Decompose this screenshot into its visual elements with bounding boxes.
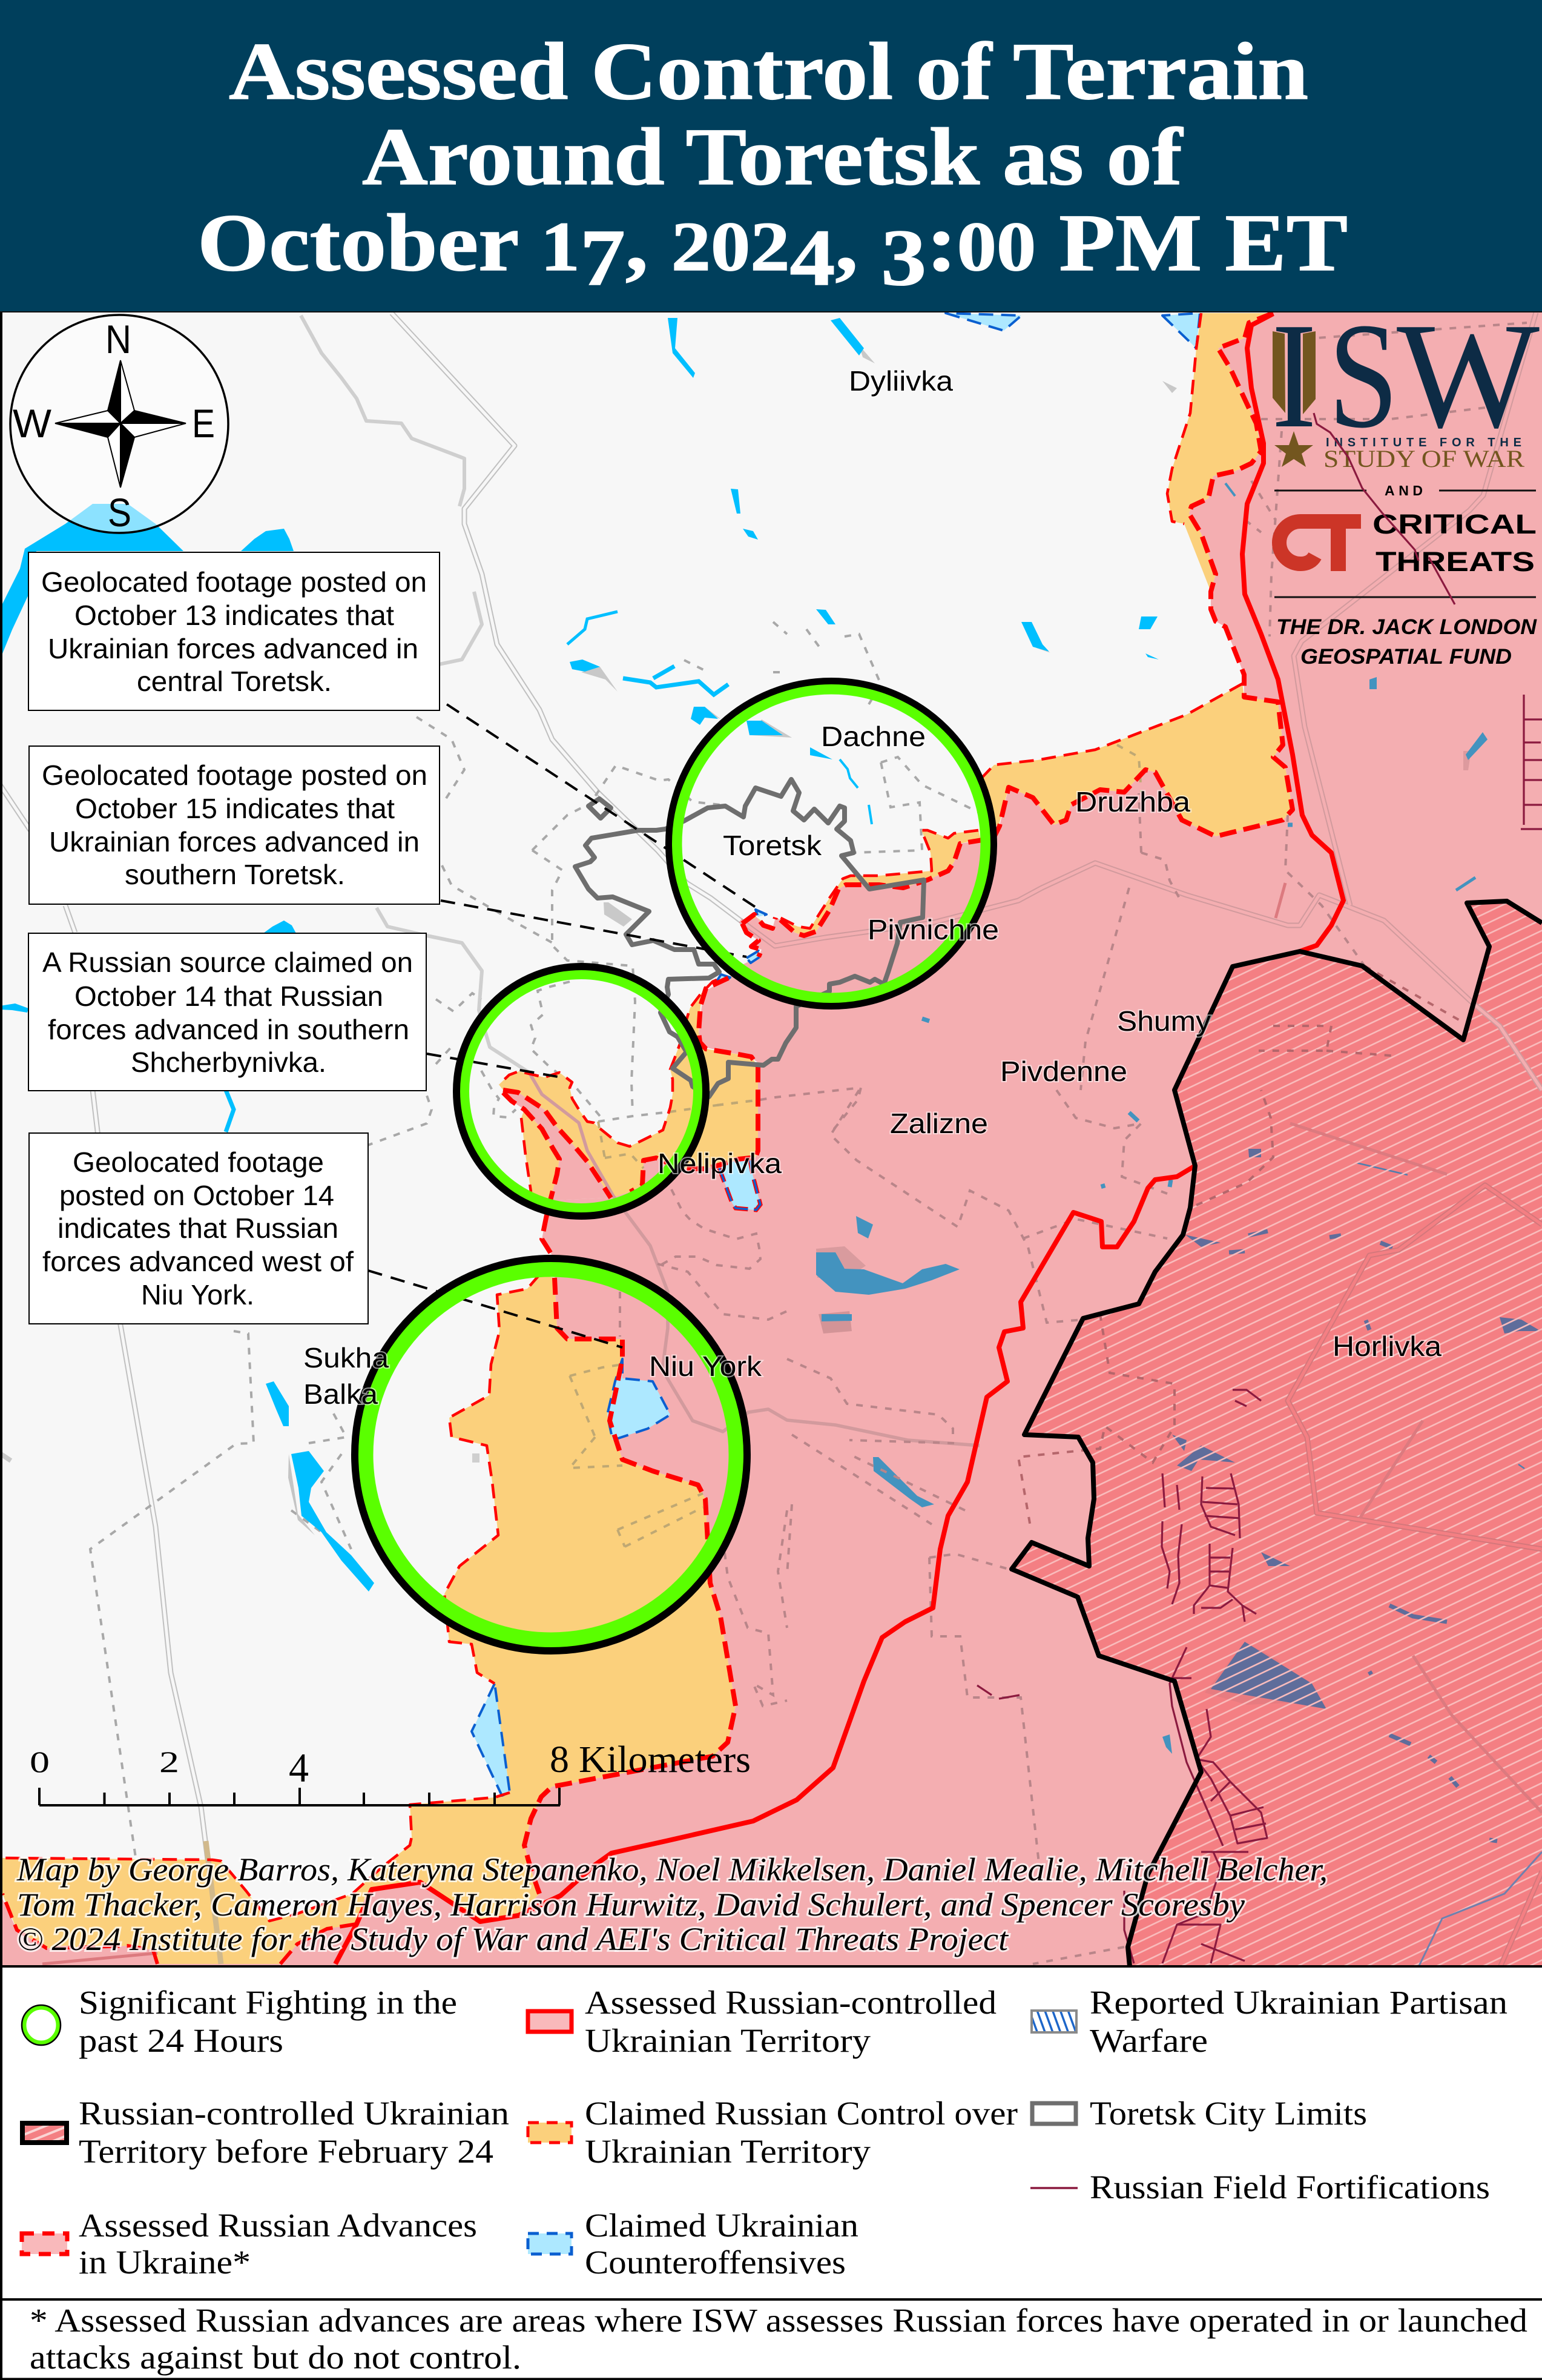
water bodies in occupied territory (816, 483, 1541, 1841)
scale bar (30, 1739, 751, 1805)
title: 3 (881, 213, 926, 302)
callout: central Toretsk: October 13 indicates that (74, 600, 394, 631)
title: , (625, 198, 671, 288)
callout: southern Shcherbynivka: forces advanced in southern (48, 1014, 409, 1045)
title: 202 (671, 208, 790, 286)
settlement labels: Pivdenne (1000, 1056, 1127, 1087)
settlement labels: Dachne (821, 721, 926, 752)
claimed Ukrainian counteroffensive areas (472, 910, 766, 1796)
logo: ISW wordmark: INSTITUTE FOR THE (1326, 436, 1521, 449)
Russian field fortifications (977, 413, 1542, 1963)
red dashed boundary of claimed and assessed Russian advances (2, 313, 1293, 1964)
title: 4 (790, 213, 835, 302)
claimed Ukrainian counteroffensive at the top edge (946, 313, 1200, 348)
legend: claimed Russian control: Claimed Russian Control over (585, 2095, 1018, 2132)
legend: pre-February 24: Territory before February 24 (79, 2133, 493, 2170)
callout: southern Toretsk: Ukrainian forces advanced in (49, 826, 420, 858)
title (197, 27, 1348, 302)
callout: central Toretsk: Ukrainian forces advanced in (48, 633, 418, 664)
callout: central Toretsk: central Toretsk. (137, 666, 332, 697)
lakes and rivers in unoccupied territory (0, 318, 1177, 1592)
compass star (55, 360, 186, 488)
legend: assessed Russian-controlled: Assessed Russian-controlled (585, 1984, 997, 2021)
hatch overlay for territory held before February 24 (1012, 901, 1542, 1966)
callout: west of Niu York: Geolocated footage (73, 1146, 324, 1178)
compass rose: E (192, 401, 215, 446)
callout: southern Toretsk (29, 746, 440, 904)
logo: Dr. Jack London fund: GEOSPATIAL FUND (1300, 645, 1512, 669)
callout: west of Niu York: Niu York. (141, 1279, 254, 1311)
settlement labels: Niu York (649, 1350, 762, 1382)
settlement labels: Balka (303, 1378, 378, 1410)
legend: assessed advances: Assessed Russian Advances (79, 2207, 477, 2244)
settlement labels: Druzhba (1075, 786, 1190, 818)
logo: ISW wordmark: W (1397, 292, 1540, 460)
legend: claimed counteroffensives (528, 2207, 858, 2281)
legend: pre-February 24: Russian-controlled Ukrainian (79, 2095, 509, 2132)
map credits (16, 1851, 1328, 1957)
legend: pre-February 24 (22, 2095, 509, 2170)
territory held before February 24: base (1012, 901, 1542, 1966)
significant fighting circle: Shcherbynivka (456, 967, 706, 1216)
callout: west of Niu York: indicates that Russian (58, 1212, 338, 1244)
logo: ISW wordmark: STUDY OF WAR (1323, 445, 1524, 472)
callout leader lines (368, 704, 756, 1347)
legend: partisan warfare: Reported Ukrainian Partisan (1090, 1984, 1507, 2021)
callout: southern Toretsk: southern Toretsk. (125, 859, 345, 890)
legend: claimed Russian control (528, 2095, 1018, 2170)
callout: southern Toretsk: October 15 indicates that (75, 793, 395, 824)
scale bar: 2 (159, 1745, 179, 1779)
legend: assessed Russian-controlled (528, 1984, 997, 2059)
dotted tracks in unoccupied territory (90, 622, 980, 1857)
assessed Russian control line (335, 314, 1343, 1964)
title: , (835, 198, 881, 288)
callout: southern Shcherbynivka: A Russian source claimed on (42, 947, 413, 978)
footnote: * Assessed Russian advances are areas where ISW assesses Russian forces have operated in or launched (30, 2302, 1527, 2339)
logo: ISW wordmark: I (1271, 292, 1317, 460)
legend: assessed advances: in Ukraine* (79, 2244, 251, 2281)
compass rose: N (105, 317, 131, 362)
logo: Critical Threats (1279, 509, 1537, 577)
settlement labels: Toretsk (723, 830, 822, 861)
legend: field fortifications: Russian Field Fortifications (1090, 2169, 1490, 2206)
compass rose: S (108, 490, 131, 535)
logo: ISW wordmark (1271, 292, 1540, 472)
legend: claimed counteroffensives: Counteroffensives (585, 2244, 846, 2281)
callout: west of Niu York: posted on October 14 (59, 1180, 334, 1211)
footnote: attacks against but do not control. (30, 2339, 521, 2376)
logo: ISW wordmark: S (1328, 292, 1399, 460)
legend: claimed Russian control: Ukrainian Territory (585, 2133, 871, 2170)
callout: southern Shcherbynivka (28, 933, 426, 1091)
footnote (0, 2299, 1542, 2380)
callout: central Toretsk (28, 552, 440, 710)
title: 7 (580, 213, 625, 302)
legend: partisan warfare (1032, 1984, 1507, 2059)
settlement labels: Shumy (1117, 1005, 1211, 1037)
logo: Dr. Jack London fund (1276, 615, 1537, 669)
header banner (0, 0, 1542, 312)
significant fighting circle: Toretsk (668, 681, 994, 1007)
logo: and: AND (1385, 483, 1423, 498)
assessed Russian advance wedge (503, 1090, 611, 1200)
institute logos (1271, 292, 1540, 669)
map credits: © 2024 Institute for the Study of War and AEI's Critical Threats Project (17, 1921, 1009, 1957)
line of control before February 24 (1012, 901, 1542, 1966)
settlement labels: Nelipivka (657, 1148, 782, 1179)
legend: assessed advances (22, 2207, 477, 2281)
settlement labels: Sukha (303, 1342, 389, 1373)
dotted tracks in occupied territory (570, 323, 1527, 1964)
map background (0, 312, 1542, 1966)
title: Around Toretsk as of (362, 112, 1184, 202)
settlement labels (303, 365, 1442, 1410)
assessed Russian-controlled territory (0, 312, 1542, 1966)
title: Assessed Control of Terrain (229, 27, 1308, 117)
legend: assessed Russian-controlled: Ukrainian Territory (585, 2022, 871, 2059)
scale bar: 8 Kilometers (550, 1739, 751, 1780)
logo: Critical Threats: CRITICAL (1372, 509, 1537, 540)
roads in occupied territory (42, 312, 1542, 1968)
roads in unoccupied territory (0, 313, 740, 1964)
compass rose: W (13, 401, 52, 446)
callout: central Toretsk: Geolocated footage posted on (41, 566, 427, 598)
Toretsk city limits (575, 779, 924, 1097)
claimed Russian control areas (2, 313, 1293, 1964)
callout: west of Niu York: forces advanced west of (42, 1246, 354, 1277)
logo: Critical Threats: THREATS (1376, 546, 1535, 577)
title: : (926, 198, 957, 288)
significant fighting circle: Niu York (355, 1258, 747, 1651)
legend: partisan warfare: Warfare (1090, 2022, 1208, 2059)
scale bar: 4 (289, 1745, 309, 1791)
title: 00 PM ET (957, 198, 1313, 288)
legend panel (0, 1966, 1542, 2299)
legend: city limits: Toretsk City Limits (1090, 2095, 1367, 2132)
settlement labels: Horlivka (1333, 1330, 1442, 1362)
map credits: Map by George Barros, Kateryna Stepanenko, Noel Mikkelsen, Daniel Mealie, Mitchell Belcher, (16, 1851, 1328, 1888)
map credits: Tom Thacker, Cameron Hayes, Harrison Hurwitz, David Schulert, and Spencer Scoresby (17, 1886, 1245, 1923)
title: October 1 (197, 198, 576, 288)
callout: southern Toretsk: Geolocated footage posted on (42, 759, 427, 791)
logo: Dr. Jack London fund: THE DR. JACK LONDON (1276, 615, 1537, 639)
callout: southern Shcherbynivka: October 14 that Russian (74, 980, 383, 1012)
scale bar: 0 (30, 1745, 50, 1779)
compass rose (10, 315, 228, 535)
legend: significant fighting: Significant Fighting in the (79, 1984, 457, 2021)
legend: significant fighting: past 24 Hours (79, 2022, 283, 2059)
callout: west of Niu York (29, 1133, 368, 1324)
settlement labels: Zalizne (890, 1108, 988, 1139)
legend: significant fighting (22, 1984, 457, 2059)
legend: claimed counteroffensives: Claimed Ukrainian (585, 2207, 858, 2244)
settlement labels: Dyliivka (849, 365, 953, 397)
settlement labels: Pivnichne (868, 914, 999, 945)
callout: southern Shcherbynivka: Shcherbynivka. (131, 1046, 326, 1078)
